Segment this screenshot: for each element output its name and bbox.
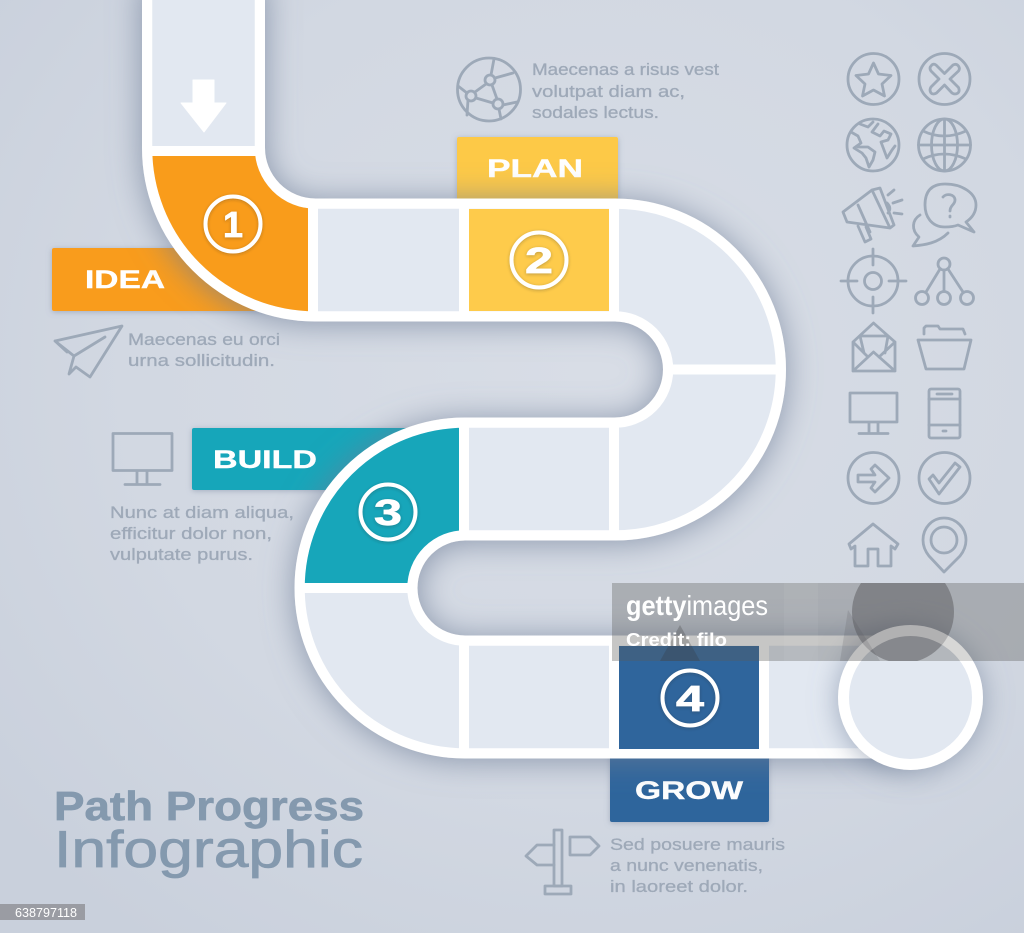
- icon: signpost: [526, 830, 599, 894]
- text: grow description: a nunc venenatis,: [610, 856, 763, 875]
- icon: network tree: [916, 258, 974, 304]
- label: PLAN: PLAN: [487, 155, 583, 183]
- number badge 3: 3: [374, 492, 402, 533]
- number badge 4: [662, 670, 718, 726]
- watermark credit text: Credit: filo: [626, 630, 727, 650]
- icon: monitor: [850, 393, 897, 434]
- label: BUILD: BUILD: [213, 446, 317, 474]
- watermark logo text: gettyimages: [626, 590, 768, 621]
- number badge 2: [512, 232, 566, 288]
- end circle: [844, 630, 978, 764]
- icon: star circle: [848, 54, 899, 104]
- number badge 1: 1: [223, 204, 243, 245]
- icon: target: [841, 249, 906, 313]
- icon: megaphone: [843, 188, 902, 242]
- segment separators: [146, 146, 782, 756]
- text: build description: efficitur dolor non,: [110, 524, 272, 543]
- icon: question chat: [913, 184, 976, 246]
- icon: down arrow: [181, 80, 226, 132]
- watermark shapes: [660, 583, 973, 661]
- image id tag: 638797118: [15, 906, 77, 920]
- icon: cross circle: [919, 54, 970, 104]
- label: GROW: [610, 750, 769, 822]
- text: grow description: Sed posuere mauris: [610, 835, 785, 854]
- text: grow description: in laoreet dolor.: [610, 877, 748, 896]
- title: Infographic: [54, 821, 363, 879]
- step 3 segment: [356, 479, 465, 588]
- number badge 3: [360, 484, 416, 540]
- step 4 segment: [619, 646, 759, 749]
- title: [54, 783, 364, 879]
- icon: network globe: [458, 58, 520, 121]
- text: idea description: [128, 330, 280, 370]
- label: PLAN: [457, 137, 618, 207]
- icon: check circle: [919, 452, 970, 504]
- title: Path Progress: [54, 783, 364, 829]
- number badge 1: [206, 196, 260, 252]
- icon: phone: [929, 389, 960, 438]
- step 1 segment: [204, 148, 315, 260]
- winding path: [146, 0, 978, 764]
- text: idea description: urna sollicitudin.: [128, 351, 275, 370]
- icon: wire globe: [918, 119, 970, 171]
- label: GROW: GROW: [635, 777, 744, 805]
- number badge 4: 4: [676, 678, 704, 719]
- label: BUILD: [192, 428, 412, 490]
- label: IDEA: [52, 248, 272, 311]
- icon: pin: [923, 518, 966, 572]
- text: plan description: [532, 60, 719, 122]
- text: plan description: Maecenas a risus vest: [532, 60, 719, 79]
- path border: [204, 0, 910, 697]
- icon: folder: [918, 326, 971, 369]
- icon: monitor left: [113, 434, 172, 484]
- text: build description: Nunc at diam aliqua,: [110, 503, 294, 522]
- icon: arrow circle: [848, 452, 899, 504]
- icon: envelope: [853, 323, 895, 371]
- text: idea description: Maecenas eu orci: [128, 330, 280, 349]
- icon: earth: [847, 119, 899, 171]
- watermark banner: [612, 583, 1024, 661]
- text: build description: [110, 503, 294, 564]
- step 2 segment: [469, 209, 609, 311]
- text: build description: vulputate purus.: [110, 545, 253, 564]
- text: plan description: volutpat diam ac,: [532, 82, 685, 101]
- icon: paper plane: [55, 326, 122, 377]
- text: grow description: [610, 835, 785, 896]
- icon: house: [849, 524, 898, 566]
- label: IDEA: IDEA: [85, 266, 165, 294]
- text: plan description: sodales lectus.: [532, 103, 659, 122]
- path fill: [204, 0, 910, 697]
- number badge 2: 2: [525, 240, 553, 281]
- image id tag: [0, 904, 85, 920]
